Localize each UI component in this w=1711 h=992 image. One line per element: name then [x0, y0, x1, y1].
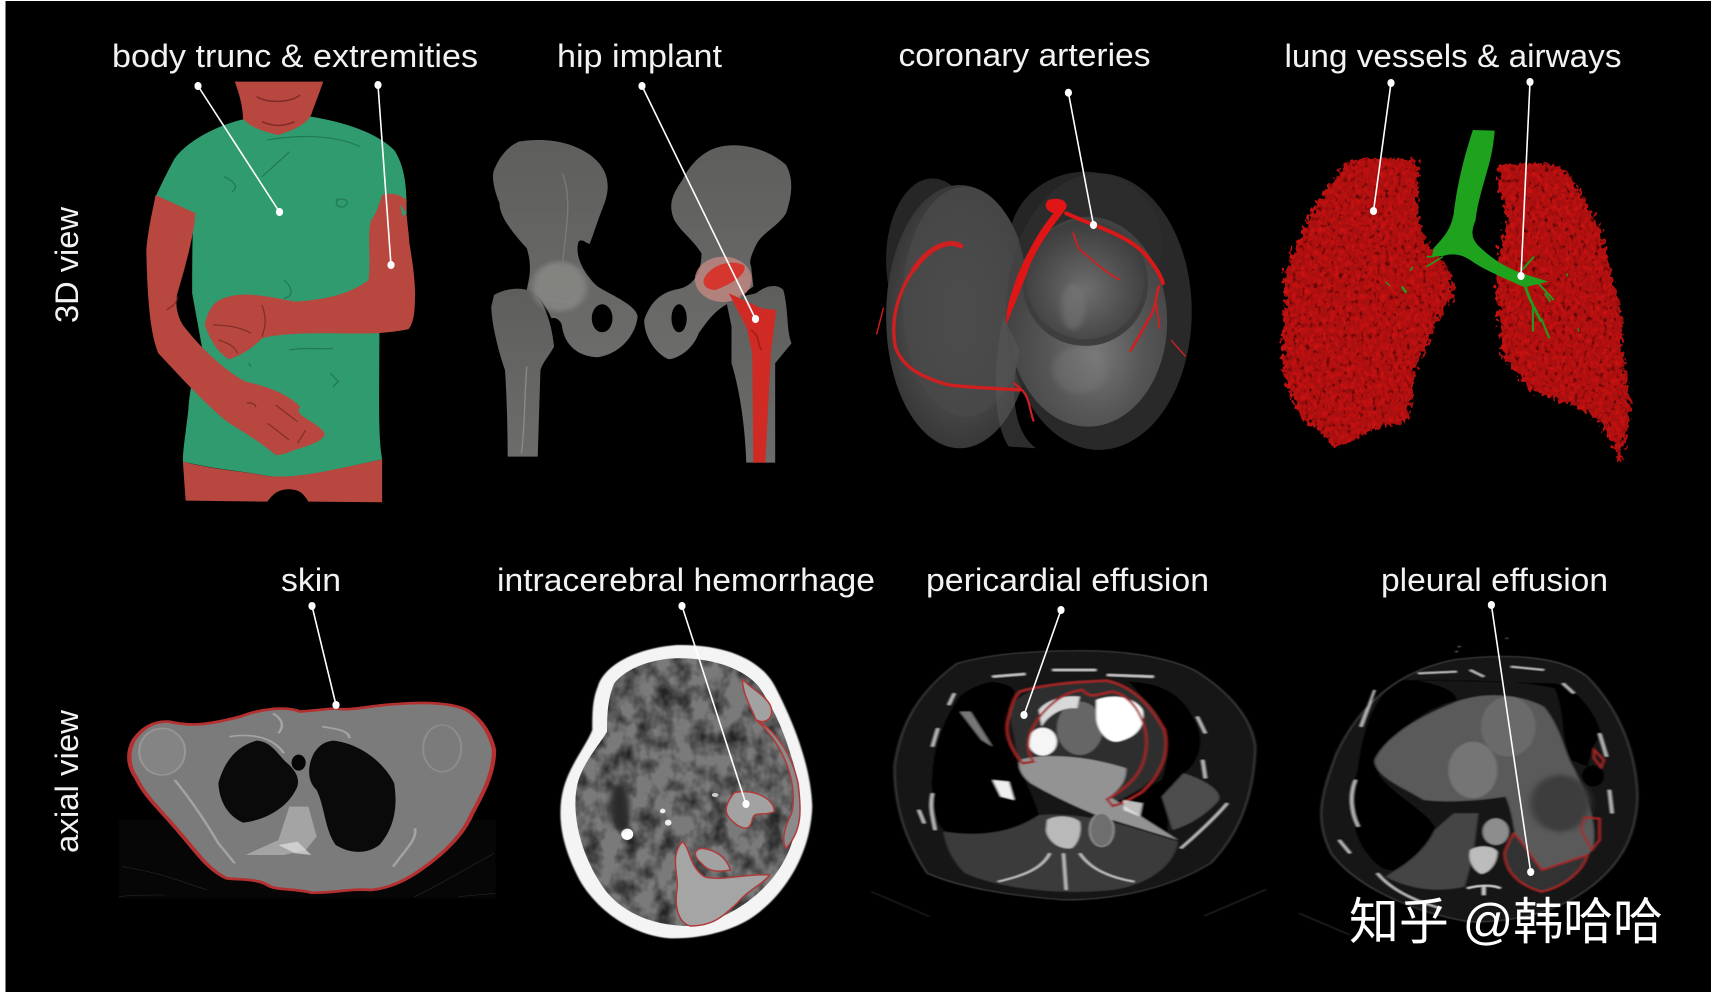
left lung: [218, 741, 298, 823]
effusion contours: [1505, 750, 1604, 892]
coronary vessels: [877, 213, 1185, 421]
upper legs in red: [183, 459, 382, 502]
trunk surface folds: [224, 137, 360, 387]
spine: [246, 807, 317, 855]
lung vessel tree: [1283, 158, 1630, 463]
chest body: [1321, 656, 1638, 922]
panel: axial skin CT: [119, 703, 496, 898]
vessels near hilum: [992, 780, 1014, 800]
scanner table background: [119, 820, 496, 898]
brain: [575, 658, 799, 926]
air in chest: [1353, 680, 1601, 870]
effusion fill: [1505, 833, 1588, 892]
panel: body trunk and extremities render: [146, 82, 415, 502]
arm surface folds: [166, 297, 306, 443]
heading: pleural effusion: pleural effusion: [1381, 562, 1608, 598]
left atrium: [1019, 756, 1178, 840]
gas pockets: [1582, 765, 1604, 787]
lungs: [932, 682, 1039, 834]
pericardial effusion contour: [1007, 681, 1166, 806]
row label: 3D view: 3D view: [49, 206, 85, 323]
leader: pericardial effusion: [1020, 606, 1065, 719]
leader: lung vessels: [1370, 79, 1395, 215]
implant stem: [729, 293, 776, 463]
heading: body trunc & extremities: body trunc & extremities: [112, 38, 478, 74]
mediastinum: [1009, 680, 1167, 803]
trachea and bronchi: [1432, 130, 1548, 287]
head and neck in red: [235, 82, 323, 135]
pelvis cut-out left: [592, 304, 612, 332]
right arm in red: [205, 194, 415, 359]
hemorrhage regions: [675, 679, 800, 926]
heart translucent chambers: [886, 178, 979, 342]
heading: lung vessels & airways: lung vessels & airways: [1284, 38, 1622, 74]
skull: [560, 645, 812, 938]
leader: coronary arteries: [1065, 89, 1097, 229]
panel: coronary arteries render: [877, 172, 1192, 450]
skin outline and soft tissue: [129, 703, 494, 893]
leader: skin: [308, 602, 340, 709]
panel: axial pericardial effusion CT: [871, 651, 1267, 917]
leader: airways: [1517, 78, 1534, 280]
liver and stomach masses: [1375, 695, 1594, 873]
heading: hip implant: hip implant: [557, 38, 722, 74]
ribs: [1339, 667, 1612, 908]
leader: hip implant: [638, 82, 759, 323]
panel: axial head CT with hemorrhage: [560, 645, 812, 938]
chest body: [894, 651, 1256, 900]
aorta and spine: [1483, 818, 1509, 845]
heading: pericardial effusion: pericardial effusion: [926, 562, 1209, 598]
calcifications: [621, 829, 633, 840]
heading: skin: skin: [281, 562, 341, 598]
watermark: 知乎 @韩哈哈: [1349, 894, 1663, 950]
table line: [1299, 913, 1350, 935]
aorta root and chambers: [1057, 702, 1103, 755]
implant femoral head: [695, 257, 752, 302]
left pelvis and femur: [491, 140, 638, 457]
lower right lung parenchyma: [1386, 813, 1478, 890]
row label: axial view: axial view: [49, 709, 85, 853]
bones: [139, 713, 461, 867]
table lines: [871, 889, 1267, 917]
leader: body trunk: [194, 82, 283, 216]
right pelvis and femur: [644, 145, 792, 463]
heading: coronary arteries: coronary arteries: [898, 37, 1150, 73]
left arm in red: [146, 195, 325, 455]
panel: axial pleural effusion CT: [1299, 638, 1638, 935]
leader lines with dots: [194, 78, 1534, 876]
leader: pleural effusion: [1488, 601, 1534, 876]
left anterior descending artery: [1006, 199, 1067, 325]
panel: lung vessels and airways render: [1283, 130, 1630, 463]
right lung: [309, 741, 396, 852]
leader: intracerebral hemorrhage: [678, 602, 750, 808]
heading: intracerebral hemorrhage: intracerebral hemorrhage: [497, 562, 875, 598]
pleural fluid in lower chest: [943, 815, 1178, 892]
panel: hip implant render: [491, 140, 792, 463]
trunk in green: [156, 117, 407, 477]
spine and bones: [1046, 816, 1081, 848]
leader: extremities: [374, 81, 395, 269]
